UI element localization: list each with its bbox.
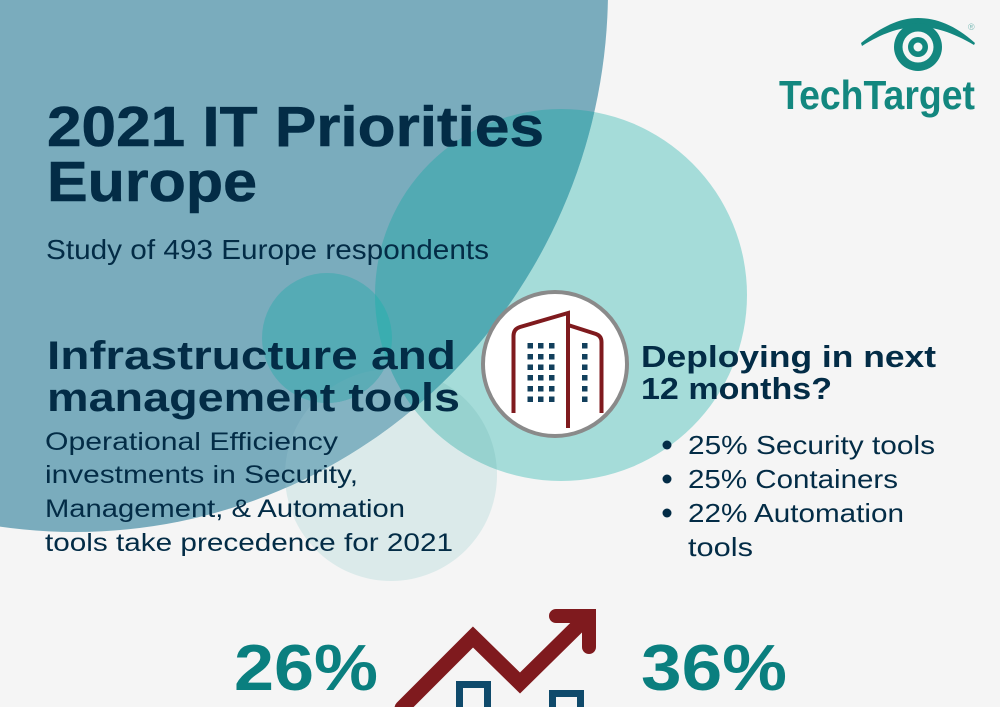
icon: office building <box>483 292 627 436</box>
stat: 26%: 26% <box>234 631 378 704</box>
heading: deploying in next 12 months: Deploying in next <box>641 339 936 374</box>
text block: operational efficiency: Operational Efficiency <box>45 428 339 456</box>
bullet list: deployment percentages: 22% Automation <box>688 498 904 528</box>
title <box>47 95 544 214</box>
heading: infrastructure and management tools <box>47 334 460 420</box>
registered mark: ® <box>968 22 975 32</box>
overlapping background circles <box>0 0 747 581</box>
icon: eye <box>861 18 975 71</box>
bullet list: deployment percentages: 25% Containers <box>688 464 898 494</box>
heading: infrastructure and management tools: Infrastructure and <box>47 334 456 378</box>
heading: deploying in next 12 months <box>641 339 936 406</box>
title: Europe <box>47 150 257 214</box>
text block: operational efficiency: investments in Security, <box>45 461 358 489</box>
icon: house with rising arrow <box>402 616 589 707</box>
text block: operational efficiency: Management, & Automation <box>45 495 405 523</box>
stat: 36%: 36% <box>641 631 787 704</box>
bullet list: deployment percentages: 25% Security tools <box>688 430 935 460</box>
heading: infrastructure and management tools: management tools <box>47 376 460 420</box>
heading: deploying in next 12 months: 12 months? <box>641 371 832 406</box>
TechTarget logo <box>779 18 975 118</box>
logo wordmark: TechTarget <box>779 72 975 118</box>
bullet list: deployment percentages <box>662 430 935 562</box>
title: 2021 IT Priorities <box>47 95 544 159</box>
text block: operational efficiency <box>45 428 453 557</box>
text block: operational efficiency: tools take precedence for 2021 <box>45 529 453 557</box>
subtitle: Study of 493 Europe respondents <box>46 234 489 265</box>
bullet list: deployment percentages: tools <box>688 532 753 562</box>
